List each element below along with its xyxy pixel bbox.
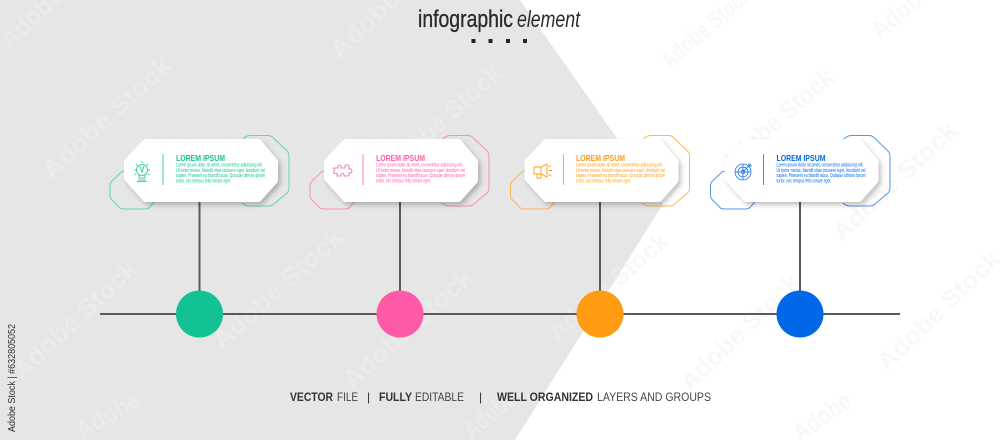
- text block: [176, 153, 265, 184]
- outline left: [310, 172, 355, 209]
- step 4: blue: [710, 136, 890, 338]
- divider: [362, 154, 364, 185]
- card: [728, 143, 874, 198]
- node: [176, 290, 223, 338]
- icon: megaphone: [534, 164, 552, 178]
- outline right: [442, 136, 489, 206]
- outline right: [843, 136, 890, 206]
- stem: [799, 200, 801, 295]
- step 2: pink: [310, 136, 489, 338]
- node: [376, 290, 424, 338]
- footer text: VECTOR: [290, 390, 333, 404]
- node: [576, 290, 624, 338]
- footer text: EDITABLE: [415, 390, 464, 404]
- watermark on white area: Adobe Stock: [827, 117, 963, 246]
- watermark on white area: Adobe Stock: [543, 227, 674, 347]
- icon: puzzle: [334, 165, 352, 176]
- text block: Lorem ipsum dolor sit amet, consectetur adipiscing elit.: [376, 162, 463, 168]
- stock id side text: Adobe Stock | #632805052: [7, 324, 18, 432]
- text block: [776, 153, 866, 184]
- stem: [198, 200, 200, 295]
- watermark on white area: [543, 0, 1000, 440]
- text block: Lorem ipsum dolor sit amet, consectetur adipiscing elit.: [776, 162, 864, 168]
- text block: Lorem ipsum dolor sit amet, consectetur adipiscing elit.: [176, 162, 263, 168]
- text block: Ut tortor metus, blandit vitae posuere eget, tincidunt vel: [776, 168, 866, 174]
- footer text: WELL ORGANIZED: [497, 390, 593, 404]
- footer text: LAYERS AND GROUPS: [597, 390, 711, 404]
- text block: tortor, nec tempus felis ornare eget.: [176, 178, 231, 184]
- text block: Lorem ipsum dolor sit amet, consectetur adipiscing elit.: [576, 162, 663, 168]
- text block: Ut tortor metus, blandit vitae posuere eget, tincidunt vel: [376, 168, 465, 174]
- text block: tortor, nec tempus felis ornare eget.: [576, 178, 631, 184]
- text block: sapien. Praesent eu blandit lacus. Quisque ultrices ipsum: [776, 173, 866, 179]
- step 1: green: [110, 136, 289, 338]
- icon: light bulb: [134, 161, 150, 182]
- text block: [376, 153, 465, 184]
- watermark on white area: Adobe Stock: [675, 268, 806, 396]
- title dots: [472, 39, 527, 43]
- watermark on grey area: Adobe Stock: [37, 51, 177, 184]
- stem: [599, 200, 601, 295]
- outline left: [510, 172, 556, 209]
- background: grey arrow shape: [0, 0, 663, 440]
- card: [128, 143, 274, 198]
- text block: [576, 153, 665, 184]
- title: infographic: [418, 6, 513, 33]
- watermark on grey area: [8, 152, 890, 432]
- card: [528, 143, 674, 198]
- text block: sapien. Praesent eu blandit lacus. Quisque ultrices ipsum: [176, 173, 265, 179]
- title: element: [517, 6, 581, 32]
- outline left: [110, 172, 155, 209]
- footer text: FULLY: [379, 390, 412, 404]
- stem: [399, 200, 401, 295]
- text block: LOREM IPSUM: [376, 153, 425, 163]
- text block: Ut tortor metus, blandit vitae posuere eget, tincidunt vel: [576, 168, 665, 174]
- watermark on grey area: Adobe Stock: [207, 223, 349, 354]
- footer text: [290, 390, 711, 404]
- text block: Ut tortor metus, blandit vitae posuere eget, tincidunt vel: [176, 168, 265, 174]
- watermark on grey area: Adobe Stock: [543, 227, 674, 347]
- card: [328, 143, 474, 198]
- footer text: |: [479, 390, 482, 404]
- outline right: [242, 136, 289, 206]
- watermark on grey area: Adobe Stock: [377, 59, 508, 180]
- text block: LOREM IPSUM: [776, 153, 826, 163]
- outline left: [710, 172, 756, 209]
- text block: LOREM IPSUM: [176, 153, 225, 163]
- text block: LOREM IPSUM: [576, 153, 625, 163]
- divider: [763, 154, 764, 185]
- watermark on grey area: Adobe Stock: [7, 255, 143, 384]
- text block: tortor, nec tempus felis ornare eget.: [376, 178, 431, 184]
- watermark on white area: Adobe Stock: [716, 63, 840, 177]
- divider: [563, 154, 564, 185]
- text block: sapien. Praesent eu blandit lacus. Quisque ultrices ipsum: [576, 173, 665, 179]
- watermark on white area: Adobe Stock: [872, 245, 1000, 376]
- node: [776, 290, 824, 338]
- icon: target: [735, 163, 752, 180]
- step 3: orange: [510, 136, 690, 338]
- timeline line: [100, 313, 900, 315]
- watermark on grey area: Adobe Stock: [337, 263, 479, 394]
- outline right: [642, 136, 690, 206]
- footer text: FILE: [337, 390, 358, 404]
- text block: tortor, nec tempus felis ornare eget.: [776, 178, 832, 184]
- divider: [162, 154, 164, 185]
- footer text: |: [367, 390, 370, 404]
- text block: sapien. Praesent eu blandit lacus. Quisque ultrices ipsum: [376, 173, 465, 179]
